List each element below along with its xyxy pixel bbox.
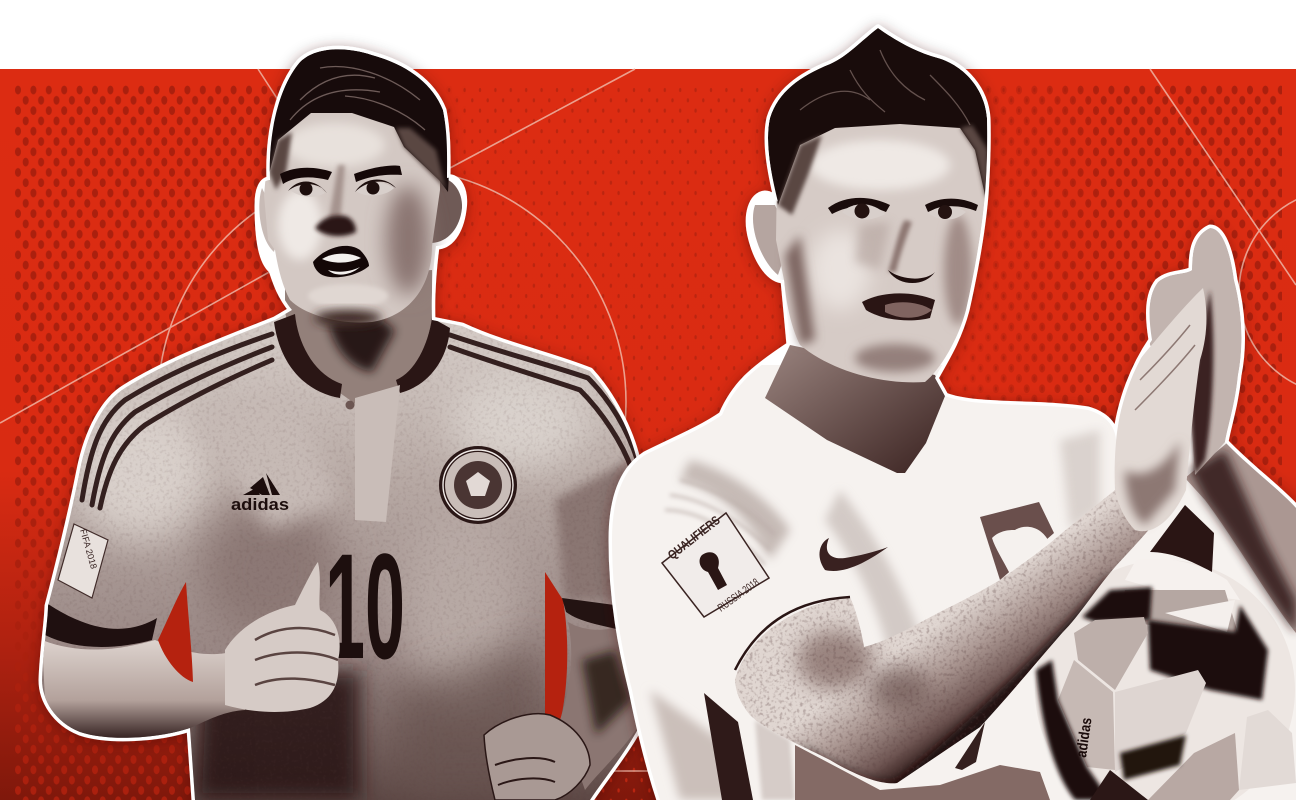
right neck	[765, 345, 945, 473]
left hair highlights	[290, 67, 425, 130]
left player artwork	[40, 49, 650, 800]
right sleeve band	[562, 598, 616, 629]
right rear hand	[1149, 228, 1241, 475]
left ear right	[432, 178, 462, 243]
right rear arm	[1185, 443, 1296, 633]
gap between torso and right arm	[545, 572, 568, 719]
left eyebrows	[280, 165, 402, 184]
right face	[776, 100, 985, 382]
left nose	[315, 216, 356, 236]
adidas logo: adidas	[231, 495, 289, 514]
adidas logo	[232, 473, 288, 510]
right nostril shadow	[888, 270, 935, 283]
left hair	[268, 49, 449, 192]
right forearm	[735, 480, 1195, 792]
right eyes	[842, 204, 966, 220]
left ear left	[259, 188, 274, 252]
right player white cut-out outline	[612, 28, 1296, 800]
player right: Robert Lewandowski	[610, 28, 1296, 800]
white top band	[0, 0, 1296, 69]
left hair fade	[269, 128, 446, 190]
left sleeve patch: FIFA 2018	[78, 528, 99, 570]
gap between body and left arm	[158, 582, 193, 682]
qualifiers patch: RUSSIA 2018	[716, 577, 762, 614]
left jersey	[40, 310, 650, 800]
left placket	[355, 385, 400, 522]
right hand	[484, 714, 590, 800]
qualifiers patch	[662, 513, 769, 617]
right tattooed arm	[560, 622, 636, 790]
left face	[264, 110, 440, 323]
right ear	[753, 205, 790, 275]
left sleeve patch	[58, 524, 108, 598]
left jersey texture	[54, 320, 631, 674]
right lower torso	[795, 745, 1050, 800]
poland crest	[980, 502, 1054, 580]
right nose	[888, 220, 912, 272]
left neck shadow	[328, 315, 395, 372]
left hand	[225, 562, 340, 712]
right jersey side stripe	[704, 693, 753, 800]
sleeve hem	[735, 597, 850, 670]
right mouth	[862, 293, 935, 320]
left mouth	[313, 246, 369, 277]
dark gap between arms	[1150, 505, 1214, 572]
nike swoosh	[819, 538, 888, 571]
right eyebrows	[828, 198, 978, 214]
qualifiers patch: QUALIFIERS	[665, 513, 723, 562]
right front hand	[1115, 288, 1206, 531]
right face shading	[785, 140, 972, 372]
left player artwork: 10	[325, 522, 405, 690]
right player artwork	[610, 28, 1296, 800]
right hair	[768, 28, 987, 205]
ball: adidas	[1073, 717, 1096, 759]
right hair highlights	[800, 50, 970, 125]
left player white cut-out outline	[42, 49, 648, 800]
left arm	[42, 640, 245, 741]
ball	[1035, 559, 1296, 800]
left crest	[439, 446, 517, 524]
left sleeve stripes	[82, 334, 638, 508]
left eyes	[288, 179, 396, 197]
jersey fold	[955, 722, 985, 770]
right jersey	[610, 365, 1296, 800]
left button	[346, 400, 354, 410]
sleeve shading	[665, 480, 775, 565]
left neck	[285, 270, 432, 404]
left face shading	[278, 123, 430, 326]
left sleeve band	[45, 604, 157, 647]
left collar	[274, 314, 450, 398]
player left: James Rodriguez	[40, 49, 650, 800]
right hair fade	[778, 125, 988, 215]
